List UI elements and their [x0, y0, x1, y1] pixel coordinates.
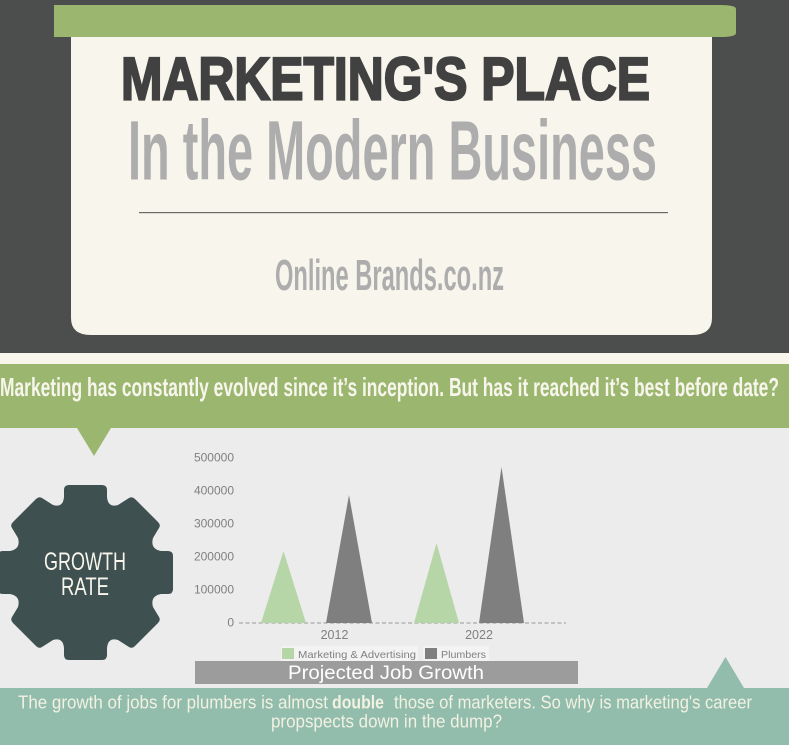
legend backing 1: [281, 646, 418, 661]
baseline: [239, 622, 566, 624]
bar chart: projected job growth: [194, 450, 578, 684]
bar: marketing 2012: [261, 551, 306, 623]
gear label line 1: GROWTH: [44, 548, 126, 576]
x axis label 2012: 2012: [321, 628, 348, 642]
gear label line 2: RATE: [61, 573, 109, 601]
y axis labels: 200000: [194, 550, 234, 564]
banner pointer: [707, 657, 744, 688]
conclusion text line 1 start: The growth of jobs for plumbers is almost: [18, 692, 328, 712]
panel: intro banner: [0, 364, 789, 456]
y axis labels: [194, 450, 234, 630]
banner background: [0, 364, 789, 428]
y axis labels: 500000: [194, 450, 234, 464]
bar: plumbers 2022: [479, 467, 524, 623]
header card: [71, 30, 712, 335]
header dark background: [0, 0, 789, 353]
panel: header: [0, 0, 789, 364]
chart title bar: [195, 661, 578, 684]
legend swatch plumbers: [425, 648, 437, 659]
bar: plumbers 2012: [326, 495, 372, 623]
legend label marketing: Marketing & Advertising: [298, 649, 416, 661]
chart title: Projected Job Growth: [288, 663, 484, 684]
banner background: [0, 688, 789, 745]
legend: [281, 646, 489, 661]
y axis labels: 0: [227, 616, 234, 630]
banner pointer: [77, 428, 111, 456]
legend backing 2: [423, 646, 489, 661]
y axis labels: 100000: [194, 582, 234, 596]
conclusion text line 2: propspects down in the dump?: [271, 712, 502, 732]
title: MARKETING'S PLACE: [121, 46, 650, 112]
divider: [139, 212, 668, 213]
gear shape: [0, 485, 173, 660]
icon: gear: [0, 485, 173, 660]
panel: conclusion banner: [0, 657, 789, 745]
cream strip: [0, 353, 789, 364]
y axis labels: 400000: [194, 484, 234, 498]
bar: marketing 2022: [414, 543, 459, 623]
green tab: [54, 5, 736, 37]
emphasis word: double: [332, 692, 384, 712]
y axis labels: 300000: [194, 516, 234, 530]
legend label plumbers: Plumbers: [441, 649, 486, 661]
conclusion text line 1 end: those of marketers. So why is marketing's career: [394, 692, 752, 712]
brand name: Online Brands.co.nz: [275, 251, 504, 300]
legend swatch marketing: [282, 648, 294, 659]
x axis label 2022: 2022: [465, 628, 493, 642]
